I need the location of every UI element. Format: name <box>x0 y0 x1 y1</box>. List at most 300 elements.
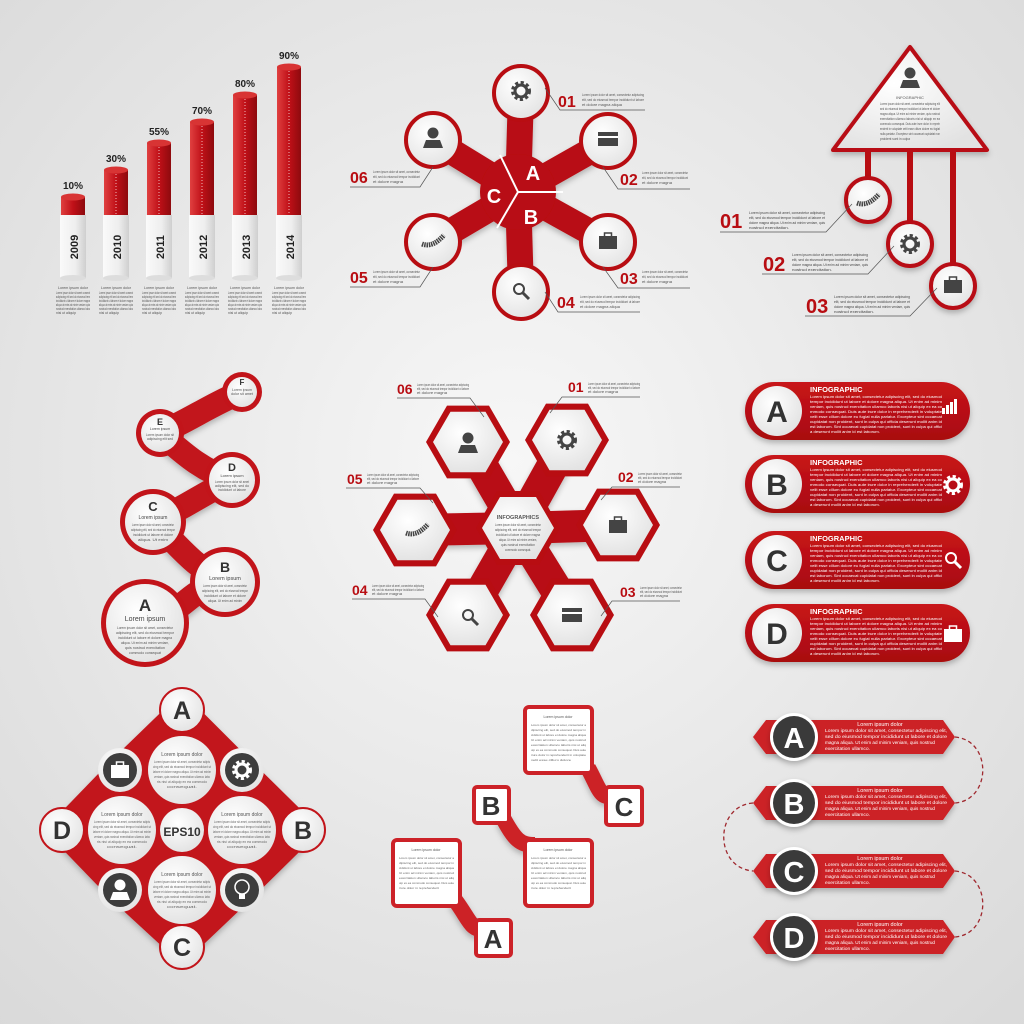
text box A: uip ex ea commodo consequat. Duis aute <box>399 881 454 885</box>
red diamond body <box>62 710 303 947</box>
labels 01-06: 01 <box>558 94 576 111</box>
panel: metaball six circles ABC: elit, sed do eiusmod tempor incididunt ut labore <box>582 98 644 102</box>
text box A: Ut enim ad minim veniam, quis nostrud <box>399 871 454 875</box>
panel: chain of circles A-F: incididunt ut labore et dolore <box>133 533 173 537</box>
bar captions: nostrud exercitation ullamco labo <box>99 307 133 311</box>
panel: chain of circles A-F: incididunt ut labore et dolore magna <box>118 636 172 640</box>
pill D: INFOGRAPHIC <box>810 607 863 616</box>
letter boxes <box>474 787 642 956</box>
triangle: commodo consequat. Duis aute irure dolor in repreh <box>880 122 940 126</box>
labels 01-06: 02 <box>620 172 638 189</box>
circles <box>106 377 257 662</box>
bar captions: nostrud exercitation ullamco labo <box>272 307 306 311</box>
panel: diamond metaball with EPS10: veniam, quis nostrud exercitation ullamco labo <box>214 835 270 839</box>
bar captions: Lorem ipsum dolor <box>230 286 261 290</box>
panel: pills A-D: mmodo consequat. Duis aute irure dolor in reprehenderit in voluptate <box>810 558 943 563</box>
panel: triangle with hanging circles: elit, sed do eiusmod tempor incididunt ut labore et <box>834 300 910 304</box>
panel: diamond metaball with EPS10: Lorem ipsum dolor sit amet, consectetur adipis <box>154 880 210 884</box>
panel: metaball six circles ABC: Lorem ipsum dolor sit amet, consectetur <box>373 270 421 274</box>
text box top: Lorem ipsum dolor <box>544 715 573 719</box>
circle texts: E <box>157 417 163 427</box>
panel: metaball six circles ABC: et dolore magna <box>642 181 672 185</box>
panel: chain of circles A-F: aliqua. Ut enim ad minim <box>208 599 242 603</box>
panel: hexagon flower: elit, sed do eiusmod tempor incididunt ut labore <box>588 386 640 390</box>
panel: diamond metaball with EPS10: consequat. <box>227 845 257 849</box>
bar captions: Lorem ipsum dolor <box>274 286 305 290</box>
banner B: Lorem ipsum dolor <box>857 788 903 794</box>
panel: hexagon flower: elit, sed do eiusmod tempor incididunt ut labore <box>372 588 424 592</box>
bar captions: incididunt ut labore et dolore magna <box>228 299 262 303</box>
triangle: sed do eiusmod tempor incididunt ut labore et dolore <box>880 107 940 111</box>
labels: 02 <box>763 254 785 276</box>
panel: pills A-D: mmodo consequat. Duis aute irure dolor in reprehenderit in voluptate <box>810 409 943 414</box>
panel: pills A-D: cupidatat non proident, sunt in culpa qui officia deserunt mollit anim id <box>810 568 942 573</box>
center hexagon: Lorem ipsum dolor sit amet, consectetur <box>495 523 542 527</box>
panel: metaball six circles ABC: Lorem ipsum dolor sit amet, consectetur <box>642 171 689 175</box>
panel: hexagon flower <box>346 379 683 651</box>
bar 2009: 2009 <box>69 235 81 259</box>
panel: chain of circles A-F: dolor sit amet <box>231 392 253 396</box>
panel: diamond metaball with EPS10: Lorem ipsum dolor sit amet, consectetur adipis <box>214 820 270 824</box>
text box top <box>525 707 592 773</box>
bar captions: incididunt ut labore et dolore magna <box>272 299 306 303</box>
labels 01-06: 06 <box>350 170 368 187</box>
panel: diamond metaball with EPS10: Lorem ipsum dolor <box>101 812 143 818</box>
panel: triangle with hanging circles <box>720 47 987 318</box>
panel: diamond metaball with EPS10 <box>40 688 325 969</box>
panel: metaball six circles ABC: et dolore magna <box>642 280 672 284</box>
panel: chain of circles A-F: Lorem ipsum <box>220 473 244 478</box>
panel: pills A-D: velit esse cillum dolore eu fugiat nulla pariatur. Excepteur sint occaecat <box>810 563 943 568</box>
center letters A B C: B <box>524 207 538 229</box>
bar captions: Lorem ipsum dolor <box>187 286 218 290</box>
bar 2010: 2010 <box>112 235 124 259</box>
bar captions: Lorem ipsum dolor sit amet consect <box>99 291 133 295</box>
red connectors <box>433 93 608 292</box>
panel: diamond metaball with EPS10: Lorem ipsum dolor <box>161 872 203 878</box>
panel: triangle with hanging circles: elit, sed do eiusmod tempor incididunt ut labore et <box>792 258 868 262</box>
panel: metaball six circles ABC: Lorem ipsum dolor sit amet, consectetur adipiscing <box>580 295 640 299</box>
panel: diamond metaball with EPS10: veniam, quis nostrud exercitation ullamco labo <box>94 835 150 839</box>
panel: diamond metaball with EPS10: ris nisi ut aliquip ex ea commodo <box>97 840 147 844</box>
circle texts: F <box>240 378 245 387</box>
panel: hexagon flower: Lorem ipsum dolor sit amet, consectetur adipiscing <box>372 584 424 588</box>
panel: diamond metaball with EPS10: Lorem ipsum dolor <box>161 752 203 758</box>
bar captions: nisi ut aliquip <box>56 311 76 315</box>
triangle: magna aliqua. Ut enim ad minim veniam, quis nostrud <box>880 112 940 116</box>
panel: chain of circles A-F: commodo consequat <box>129 651 161 655</box>
bar captions: nisi ut aliquip <box>228 311 248 315</box>
panel: chain of circles A-F: quis nostrud exercitation <box>125 646 165 650</box>
hanging bars <box>865 152 956 264</box>
panel: metaball six circles ABC: elit, sed do eiusmod tempor incididunt ut labore <box>580 300 640 304</box>
panel: hexagon flower: Lorem ipsum dolor sit amet, consectetur adipiscing <box>417 383 469 387</box>
bar captions: adipiscing elit sed do eiusmod tem <box>99 295 133 299</box>
labels <box>720 211 828 318</box>
bar captions: aliqua ut enim ad minim veniam quis <box>272 303 306 307</box>
panel: bar chart 2009-2014 <box>56 51 306 315</box>
panel: pills A-D: tempor incididunt ut labore et dolore magna aliqua. Ut enim ad minim <box>810 621 943 626</box>
banner D: sed do eiusmod tempor incididunt ut labore et dolore <box>825 934 948 939</box>
text box middle: cididunt ut labore et dolore magna aliqua <box>531 866 586 870</box>
panel: diamond metaball with EPS10: Lorem ipsum dolor <box>221 812 263 818</box>
pill B: INFOGRAPHIC <box>810 458 863 467</box>
bar 2009: 10% <box>63 181 83 192</box>
panel: metaball six circles ABC: Lorem ipsum dolor sit amet, consectetur <box>642 270 689 274</box>
panel: metaball six circles ABC: et dolore magna <box>373 280 403 284</box>
panel: pills A-D: velit esse cillum dolore eu fugiat nulla pariatur. Excepteur sint occaecat <box>810 414 943 419</box>
panel: chain of circles A-F: Lorem ipsum dolor sit amet, consectetur <box>117 626 174 630</box>
panel: pills A-D: mmodo consequat. Duis aute irure dolor in reprehenderit in voluptate <box>810 631 943 636</box>
panel: pills A-D: veniam, quis nostrud exercitation ullamco laboris nisi ut aliquip ex ea co <box>810 477 943 482</box>
panel: diamond metaball with EPS10: consequat. <box>167 785 197 789</box>
panel: diamond metaball with EPS10: labore et dolore magna aliqua. Ut enim ad minim <box>93 830 151 834</box>
panel: hexagon flower: elit, sed do eiusmod tempor incididunt ut labore <box>417 387 469 391</box>
banner A: Lorem ipsum dolor <box>857 722 903 728</box>
bar captions: Lorem ipsum dolor <box>58 286 89 290</box>
red connectors <box>415 440 618 615</box>
banner D: Lorem ipsum dolor sit amet, consectetur adipiscing elit, <box>825 928 947 933</box>
panel: hexagon flower: et dolore magna <box>417 391 447 395</box>
panel: metaball six circles ABC: et dolore magna aliqua <box>582 103 622 107</box>
bar captions: aliqua ut enim ad minim veniam quis <box>56 303 90 307</box>
text box top: uip ex ea commodo consequat. Duis aute <box>531 748 586 752</box>
panel: diamond metaball with EPS10: consequat. <box>167 905 197 909</box>
banner D: D <box>784 923 804 955</box>
panel: triangle with hanging circles: dolore magna aliqua. Ut enim ad minim veniam, quis <box>749 221 825 225</box>
panel: diamond metaball with EPS10: cing elit, sed do eiusmod tempor incididunt ut <box>153 885 211 889</box>
panel: pills A-D: velit esse cillum dolore eu fugiat nulla pariatur. Excepteur sint occaecat <box>810 487 943 492</box>
triangle: proident sunt in culpa <box>880 137 910 141</box>
panel: diamond metaball with EPS10: ris nisi ut aliquip ex ea commodo <box>157 780 207 784</box>
banner B: exercitation ullamco. <box>825 812 870 817</box>
text box A: exercitation ullamco laboris nisi ut aliq <box>399 876 454 880</box>
bar captions: Lorem ipsum dolor sit amet consect <box>142 291 176 295</box>
bar 2014: 2014 <box>285 234 297 259</box>
banner C: Lorem ipsum dolor <box>857 856 903 862</box>
text box middle: Lorem ipsum dolor sit amet, consectetur a <box>531 856 586 860</box>
bar 2012: 70% <box>192 106 212 117</box>
panel: pills A-D: a deserunt mollit anim id est laborum. <box>810 651 880 656</box>
labels 01-06: 03 <box>620 271 638 288</box>
labels 01-06: 05 <box>350 270 368 287</box>
panel: diamond metaball with EPS10: B <box>294 817 312 845</box>
bar captions: Lorem ipsum dolor sit amet consect <box>56 291 90 295</box>
panel: chain of circles A-F: aliqua. Ut enim <box>138 538 168 542</box>
text box middle: Lorem ipsum dolor <box>544 848 573 852</box>
labels: 03 <box>806 296 828 318</box>
text box top: Ut enim ad minim veniam, quis nostrud <box>531 738 586 742</box>
panel: diamond metaball with EPS10: consequat. <box>107 845 137 849</box>
panel: chain of circles A-F: Lorem ipsum <box>150 427 170 431</box>
panel: hexagon flower: et dolore magna <box>588 390 618 394</box>
banner C <box>753 847 955 895</box>
panel: hexagon flower: elit, sed do eiusmod tempor incididunt ut labore <box>367 477 419 481</box>
labels 01-06: 04 <box>557 295 575 312</box>
panel: pills A-D: cupidatat non proident, sunt in culpa qui officia deserunt mollit anim id <box>810 641 942 646</box>
panel: pills A-D: velit esse cillum dolore eu fugiat nulla pariatur. Excepteur sint occaecat <box>810 636 943 641</box>
banner A: sed do eiusmod tempor incididunt ut labore et dolore <box>825 734 948 739</box>
panel: chain of circles A-F: incididunt ut labore et dolore <box>204 594 246 598</box>
bar 2010 <box>103 154 129 281</box>
panel: hexagon flower: elit, sed do eiusmod tempor incididunt <box>638 476 682 480</box>
center hexagon: commodo consequat. <box>505 548 531 552</box>
banner B: Lorem ipsum dolor sit amet, consectetur adipiscing elit, <box>825 794 947 799</box>
panel: diamond metaball with EPS10: veniam, quis nostrud exercitation ullamco labo <box>154 775 210 779</box>
bar captions: nisi ut aliquip <box>272 311 292 315</box>
pill B: B <box>766 469 788 502</box>
panel: hexagon flower: et dolore magna <box>640 594 668 598</box>
red chain <box>145 392 242 623</box>
panel: pills A-D: cupidatat non proident, sunt in culpa qui officia deserunt mollit anim id <box>810 492 942 497</box>
panel: pills A-D <box>745 382 970 662</box>
text box top: cididunt ut labore et dolore magna aliqua <box>531 733 586 737</box>
triangle <box>833 47 987 150</box>
banner A: magna aliqua. Ut enim ad minim veniam, quis nostrud <box>825 740 936 745</box>
panel: triangle with hanging circles: dolore magna aliqua. Ut enim ad minim veniam, quis <box>834 305 910 309</box>
bar 2013: 2013 <box>241 235 253 259</box>
circles <box>846 178 975 308</box>
panel: pills A-D: est laborum. Sint occaecat cupidatat non proident, sunt in culpa qui offici <box>810 573 942 578</box>
panel: pills A-D: Lorem ipsum dolor sit amet, consectetur adipiscing elit, sed do eiusmod <box>810 616 942 621</box>
panel: pills A-D: est laborum. Sint occaecat cupidatat non proident, sunt in culpa qui offici <box>810 424 942 429</box>
text box middle: uip ex ea commodo consequat. Duis aute <box>531 881 586 885</box>
banner A: exercitation ullamco. <box>825 746 870 751</box>
bar captions: aliqua ut enim ad minim veniam quis <box>142 303 176 307</box>
panel: triangle with hanging circles: elit, sed do eiusmod tempor incididunt ut labore et <box>749 216 825 220</box>
text box A: Lorem ipsum dolor <box>412 848 441 852</box>
hex labels: 05 <box>347 471 363 487</box>
panel: triangle with hanging circles: nostrud exercitation. <box>834 310 874 314</box>
panel: square boxes A B C <box>393 707 642 956</box>
panel: metaball six circles ABC: et dolore magna aliqua <box>580 305 620 309</box>
panel: pills A-D: tempor incididunt ut labore et dolore magna aliqua. Ut enim ad minim <box>810 472 943 477</box>
letter boxes: A <box>484 924 503 954</box>
bar 2012: 2012 <box>198 235 210 259</box>
panel: diamond metaball with EPS10: cing elit, sed do eiusmod tempor incididunt ut <box>93 825 151 829</box>
panel: hexagon flower: Lorem ipsum dolor sit amet, consectetur adipiscing <box>588 382 640 386</box>
panel: pills A-D: a deserunt mollit anim id est laborum. <box>810 429 880 434</box>
bar captions: nisi ut aliquip <box>142 311 162 315</box>
panel: diamond metaball with EPS10: A <box>173 697 191 725</box>
panel: metaball six circles ABC: elit, sed do eiusmod tempor incididunt <box>642 176 688 180</box>
panel: chain of circles A-F: adipiscing elit, sed do eiusmod tempor <box>202 589 249 593</box>
text box A: dipiscing elit, sed do eiusmod tempor in <box>399 861 454 865</box>
text box top: Lorem ipsum dolor sit amet, consectetur a <box>531 723 586 727</box>
letter boxes: C <box>615 792 634 822</box>
pill D: D <box>766 618 788 651</box>
panel: diamond metaball with EPS10: Lorem ipsum dolor sit amet, consectetur adipis <box>154 760 210 764</box>
panel: diamond metaball with EPS10: D <box>53 817 71 845</box>
hex icons <box>406 432 627 625</box>
bar captions: nostrud exercitation ullamco labo <box>185 307 219 311</box>
panel: diamond metaball with EPS10: labore et dolore magna aliqua. Ut enim ad minim <box>153 770 211 774</box>
panel: chain of circles A-F: Lorem ipsum <box>209 576 241 582</box>
panel: hexagon flower: et dolore magna <box>638 480 666 484</box>
center letters A B C: C <box>487 186 501 208</box>
panel: chain of circles A-F: incididunt ut labore <box>218 488 246 492</box>
pill C <box>745 531 970 589</box>
bar captions: nostrud exercitation ullamco labo <box>142 307 176 311</box>
banner D: exercitation ullamco. <box>825 946 870 951</box>
panel: pills A-D: Lorem ipsum dolor sit amet, consectetur adipiscing elit, sed do eiusmod <box>810 394 942 399</box>
bar 2011: 2011 <box>155 235 167 259</box>
bar captions: incididunt ut labore et dolore magna <box>142 299 176 303</box>
banner A: A <box>784 723 805 755</box>
hexagons <box>373 404 660 651</box>
hex labels: 04 <box>352 582 368 598</box>
panel: metaball six circles ABC: elit, sed do eiusmod tempor incididunt <box>373 275 420 279</box>
labels: 01 <box>720 211 742 233</box>
text box top: exercitation ullamco laboris nisi ut aliq <box>531 743 586 747</box>
banner B: B <box>784 789 804 821</box>
bar 2011: 55% <box>149 127 169 138</box>
bar 2014 <box>276 51 302 281</box>
bar captions: nostrud exercitation ullamco labo <box>56 307 90 311</box>
panel: pills A-D: a deserunt mollit anim id est laborum. <box>810 502 880 507</box>
panel: pills A-D: est laborum. Sint occaecat cupidatat non proident, sunt in culpa qui offici <box>810 646 942 651</box>
bar captions: Lorem ipsum dolor <box>101 286 132 290</box>
hex labels: 03 <box>620 584 636 600</box>
pill A <box>745 382 970 440</box>
panel: metaball six circles ABC <box>350 66 690 319</box>
panel: diamond metaball with EPS10: veniam, quis nostrud exercitation ullamco labo <box>154 895 210 899</box>
bar captions <box>56 286 306 315</box>
pill B <box>745 455 970 513</box>
bar captions: Lorem ipsum dolor sit amet consect <box>185 291 219 295</box>
text box top: velit esse cillum dolore <box>531 758 571 762</box>
panel: pills A-D: est laborum. Sint occaecat cupidatat non proident, sunt in culpa qui offici <box>810 497 942 502</box>
banner C: exercitation ullamco. <box>825 880 870 885</box>
text box middle: exercitation ullamco laboris nisi ut aliq <box>531 876 586 880</box>
bar 2014: 90% <box>279 51 299 62</box>
panel: triangle with hanging circles: Lorem ipsum dolor sit amet, consectetur adipiscing <box>834 295 910 299</box>
text blobs <box>88 736 276 924</box>
bar 2010: 30% <box>106 154 126 165</box>
bar 2013: 80% <box>235 79 255 90</box>
triangle: nulla pariatur. Excepteur sint occaecat cupidatat non <box>880 132 940 136</box>
panel: metaball six circles ABC: Lorem ipsum dolor sit amet, consectetur adipiscing <box>582 93 644 97</box>
center letters A B C: A <box>526 163 540 185</box>
panel: chain of circles A-F: Lorem ipsum <box>139 515 167 521</box>
circle texts: C <box>148 499 158 514</box>
bar captions: aliqua ut enim ad minim veniam quis <box>185 303 219 307</box>
panel: pills A-D: veniam, quis nostrud exercitation ullamco laboris nisi ut aliquip ex ea co <box>810 553 943 558</box>
text box A <box>393 840 460 906</box>
hex labels: 01 <box>568 379 584 395</box>
bar captions: adipiscing elit sed do eiusmod tem <box>142 295 176 299</box>
banner D: magna aliqua. Ut enim ad minim veniam, quis nostrud <box>825 940 936 945</box>
text box middle: Ut enim ad minim veniam, quis nostrud <box>531 871 586 875</box>
text box middle: irure dolor in reprehenderit <box>531 886 571 890</box>
panel: chain of circles A-F: Lorem ipsum dolor sit amet, consectetur <box>203 584 248 588</box>
panel: chain of circles A-F: adipiscing elit sed <box>147 437 173 441</box>
banner D <box>753 913 955 961</box>
pill C: C <box>766 545 788 578</box>
bar 2013 <box>232 79 258 281</box>
center hexagon: adipiscing elit, sed do eiusmod tempor <box>495 528 542 532</box>
panel: triangle with hanging circles: nostrud exercitation. <box>749 226 789 230</box>
panel: metaball six circles ABC: elit, sed do eiusmod tempor incididunt <box>642 275 688 279</box>
banner D: Lorem ipsum dolor <box>857 922 903 928</box>
panel: pills A-D: veniam, quis nostrud exercitation ullamco laboris nisi ut aliquip ex ea co <box>810 404 943 409</box>
red curved connectors <box>455 768 615 930</box>
circle texts: A <box>139 596 151 615</box>
bar 2012 <box>189 106 215 281</box>
pill C: INFOGRAPHIC <box>810 534 863 543</box>
bar captions: aliqua ut enim ad minim veniam quis <box>228 303 262 307</box>
hex labels: 06 <box>397 381 413 397</box>
banner B: sed do eiusmod tempor incididunt ut labore et dolore <box>825 800 948 805</box>
bar captions: aliqua ut enim ad minim veniam quis <box>99 303 133 307</box>
bar captions: adipiscing elit sed do eiusmod tem <box>228 295 262 299</box>
panel: chain of circles A-F: adipiscing elit, sed do eiusmod tempor <box>116 631 175 635</box>
bar captions: adipiscing elit sed do eiusmod tem <box>185 295 219 299</box>
text box middle <box>525 840 592 906</box>
circle texts: B <box>220 559 230 575</box>
text box A: cididunt ut labore et dolore magna aliqua <box>399 866 454 870</box>
panel: metaball six circles ABC: Lorem ipsum dolor sit amet, consectetur <box>373 170 421 174</box>
bar captions: nisi ut aliquip <box>99 311 119 315</box>
center letters A B C <box>487 155 563 229</box>
icon circles <box>98 748 264 912</box>
triangle: exercitation ullamco laboris nisi ut aliquip ex ea <box>880 117 940 121</box>
banner A <box>753 713 955 761</box>
dashed connectors <box>724 737 983 937</box>
circles with icons <box>406 66 635 319</box>
text box A: irure dolor in reprehenderit <box>399 886 439 890</box>
banner C: magna aliqua. Ut enim ad minim veniam, quis nostrud <box>825 874 936 879</box>
center hexagon: INFOGRAPHICS <box>497 515 539 521</box>
panel: pills A-D: a deserunt mollit anim id est laborum. <box>810 578 880 583</box>
panel: diamond metaball with EPS10: ris nisi ut aliquip ex ea commodo <box>157 900 207 904</box>
panel: chain of circles A-F: adipiscing elit, sed do <box>215 484 249 488</box>
panel: hexagon flower: et dolore magna <box>367 481 397 485</box>
panel: pills A-D: veniam, quis nostrud exercitation ullamco laboris nisi ut aliquip ex ea co <box>810 626 943 631</box>
panel: pills A-D: tempor incididunt ut labore et dolore magna aliqua. Ut enim ad minim <box>810 548 943 553</box>
panel: pills A-D: Lorem ipsum dolor sit amet, consectetur adipiscing elit, sed do eiusmod <box>810 543 942 548</box>
bar captions: Lorem ipsum dolor sit amet consect <box>272 291 306 295</box>
bar 2009 <box>60 181 86 281</box>
panel: hexagon flower: Lorem ipsum dolor sit amet, consectetur <box>638 472 683 476</box>
panel: chain of circles A-F: Lorem ipsum dolor sit <box>146 433 174 437</box>
panel: chain of circles A-F: Lorem ipsum dolor sit amet <box>215 480 249 484</box>
panel: chain of circles A-F: Lorem ipsum <box>125 616 165 623</box>
hex labels: 02 <box>618 469 634 485</box>
panel: metaball six circles ABC: et dolore magna <box>373 180 403 184</box>
panel: pills A-D: tempor incididunt ut labore et dolore magna aliqua. Ut enim ad minim <box>810 399 943 404</box>
center hexagon: incididunt ut labore et dolore magna <box>496 533 540 537</box>
bar captions: incididunt ut labore et dolore magna <box>185 299 219 303</box>
text box middle: dipiscing elit, sed do eiusmod tempor in <box>531 861 586 865</box>
letter circles <box>40 688 325 969</box>
center hexagon <box>476 491 560 565</box>
banner B <box>753 779 955 827</box>
text box top: irure dolor in reprehenderit in voluptate <box>531 753 586 757</box>
panel: diamond metaball with EPS10: labore et dolore magna aliqua. Ut enim ad minim <box>213 830 271 834</box>
panel: chain of circles A-F: aliqua. Ut enim ad minim veniam, <box>121 641 169 645</box>
panel: triangle with hanging circles: Lorem ipsum dolor sit amet, consectetur adipiscing <box>749 211 825 215</box>
bar 2011 <box>146 127 172 281</box>
circle texts: D <box>228 462 236 474</box>
bar captions: adipiscing elit sed do eiusmod tem <box>56 295 90 299</box>
center hexagon: aliqua. Ut enim ad minim veniam, <box>499 538 537 542</box>
center hexagon: quis nostrud exercitation <box>501 543 535 547</box>
banner C: C <box>784 857 805 889</box>
panel: diamond metaball with EPS10: cing elit, sed do eiusmod tempor incididunt ut <box>153 765 211 769</box>
circle texts <box>139 378 245 615</box>
triangle: INFOGRAPHIC <box>896 95 924 100</box>
